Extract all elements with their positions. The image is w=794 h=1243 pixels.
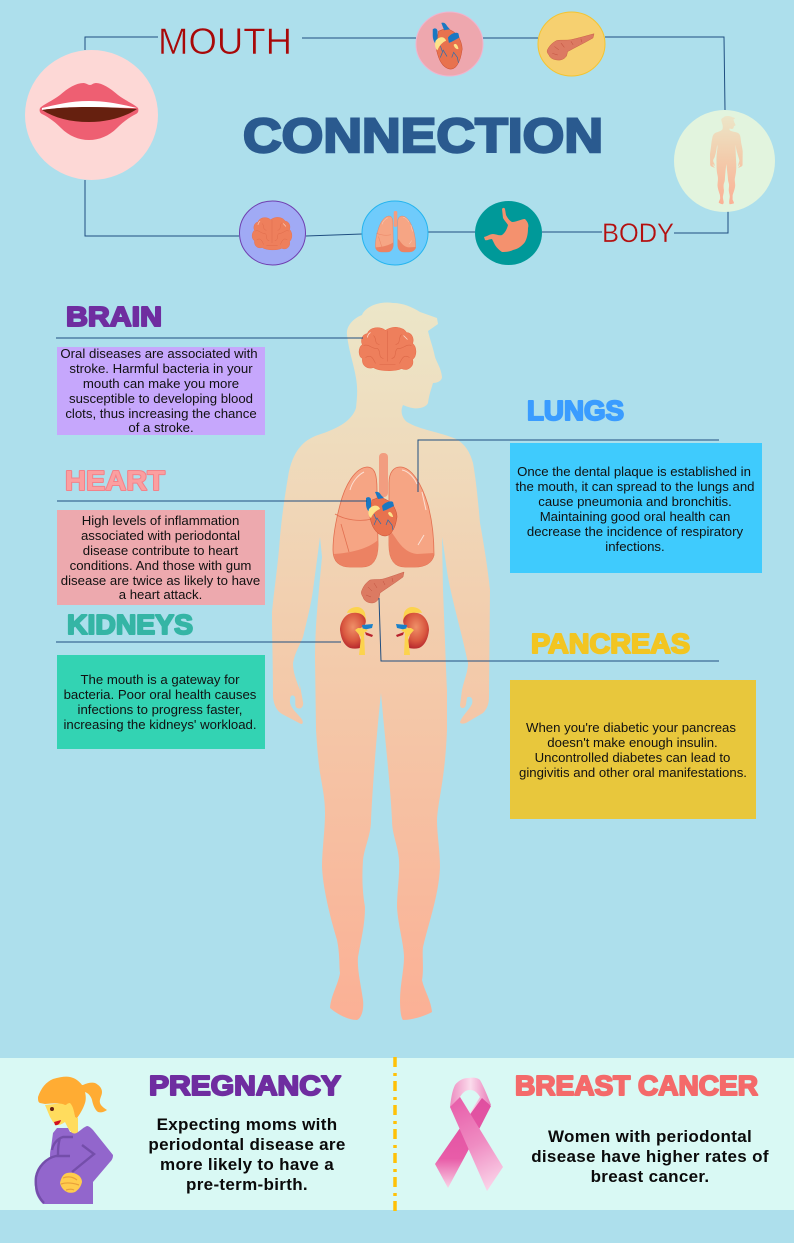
organ: left kidney (340, 607, 373, 655)
text: lungs: infections. (605, 539, 665, 554)
text: breast cancer: disease have higher rates of (531, 1147, 769, 1166)
eye and mouth (50, 1107, 61, 1125)
organ: brain (359, 327, 416, 371)
text: pregnancy: periodontal disease are (148, 1135, 346, 1154)
text: kidneys: bacteria. Poor oral health causes (64, 687, 257, 702)
icon: lungs circle (362, 201, 428, 265)
text: heart: disease contribute to heart (83, 543, 239, 558)
icon: pink ribbon (435, 1078, 503, 1191)
text: brain: Oral diseases are associated with (60, 346, 258, 361)
text: kidneys: infections to progress faster, (78, 702, 242, 717)
panel: brain (57, 301, 265, 435)
text: lungs: Maintaining good oral health can (540, 509, 730, 524)
text: lungs: cause pneumonia and bronchitis. (538, 494, 732, 509)
heading: brain: BRAIN (66, 301, 162, 332)
panel: bottom band (0, 1058, 794, 1210)
text: heart: disease are twice as likely to have (61, 573, 260, 588)
icon: brain circle (240, 201, 306, 265)
panel: mouth-body connection header diagram (25, 12, 775, 265)
text: breast cancer: breast cancer. (591, 1167, 709, 1186)
text: lungs: Once the dental plaque is established in (517, 464, 751, 479)
text: heart: High levels of inflammation (82, 513, 239, 528)
text: brain: susceptible to developing blood (69, 391, 253, 406)
text: kidneys: The mouth is a gateway for (80, 672, 240, 687)
title: CONNECTION (243, 110, 603, 163)
illustration: human body with organs (272, 303, 490, 1020)
heading: kidneys: KIDNEYS (67, 609, 193, 640)
icon: stomach circle (475, 201, 542, 265)
text: heart: associated with periodontal (81, 528, 240, 543)
text: breast cancer: Women with periodontal (548, 1127, 752, 1146)
text: pregnancy: Expecting moms with (157, 1115, 337, 1134)
heading: lungs: LUNGS (527, 395, 624, 426)
text: heart: a heart attack. (119, 587, 202, 602)
heading: breast cancer: BREAST CANCER (515, 1070, 758, 1101)
text: lungs: the mouth, it can spread to the lungs and (516, 479, 754, 494)
panel: lungs (510, 395, 762, 573)
text: pregnancy: more likely to have a (160, 1155, 334, 1174)
panel: heart (57, 465, 265, 605)
icon: pregnant woman (35, 1077, 113, 1204)
label: BODY: BODY (602, 218, 674, 248)
text: lungs: decrease the incidence of respiratory (527, 524, 744, 539)
heading: pregnancy: PREGNANCY (149, 1070, 341, 1101)
heading: pancreas: PANCREAS (531, 628, 690, 659)
text: pancreas: doesn't make enough insulin. (547, 735, 718, 750)
text: brain: of a stroke. (128, 420, 194, 435)
icon: body circle (674, 110, 775, 212)
icon: mouth circle (25, 50, 158, 180)
organ: heart (366, 492, 397, 536)
leader lines (56, 338, 719, 661)
heading: heart: HEART (65, 465, 165, 496)
icon: heart circle (416, 12, 483, 76)
panel: pancreas (510, 628, 756, 819)
label: MOUTH: MOUTH (158, 21, 292, 62)
text: pancreas: gingivitis and other oral manifestations. (519, 765, 747, 780)
organ: pancreas (361, 572, 404, 603)
text: brain: clots, thus increasing the chance (65, 406, 257, 421)
text: heart: conditions. And those with gum (70, 558, 251, 573)
text: brain: stroke. Harmful bacteria in your (69, 361, 253, 376)
organ: lungs (333, 453, 434, 567)
organ: right kidney (396, 607, 429, 655)
icon: pancreas circle (538, 12, 605, 76)
panel: kidneys (57, 609, 265, 749)
text: pancreas: Uncontrolled diabetes can lead to (535, 750, 730, 765)
text: pancreas: When you're diabetic your pancreas (526, 720, 736, 735)
text: pregnancy: pre-term-birth. (186, 1175, 308, 1194)
text: brain: mouth can make you more (83, 376, 239, 391)
text: kidneys: increasing the kidneys' workload. (63, 717, 257, 732)
